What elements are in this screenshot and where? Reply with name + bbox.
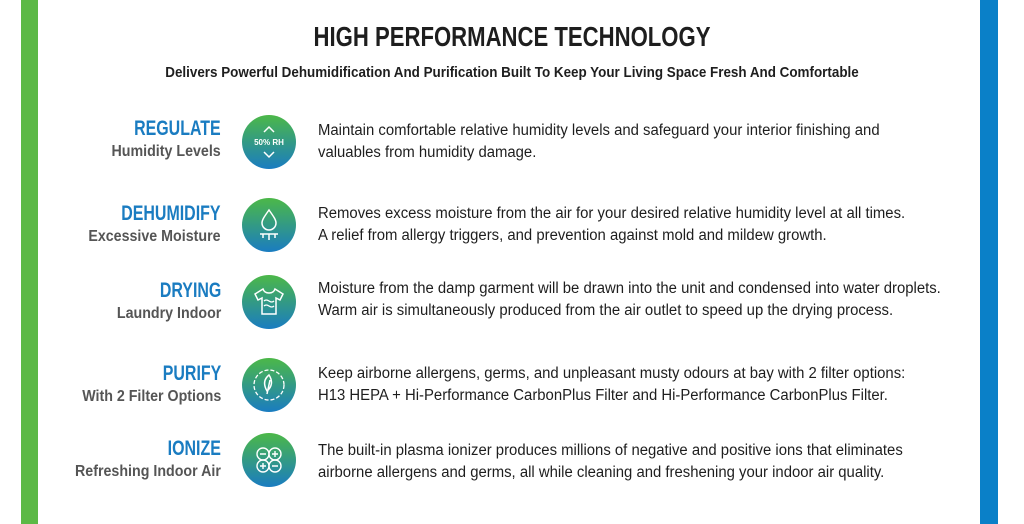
description: ionize: The built-in plasma ionizer produces millions of negative and positive ions that eliminates <box>318 442 903 459</box>
heading: dehumidify <box>89 202 221 245</box>
row: regulate <box>112 115 880 169</box>
icon: ions <box>242 433 296 487</box>
row: ionize <box>75 433 903 487</box>
icon: water drop <box>242 198 296 252</box>
heading: dehumidify: DEHUMIDIFY <box>122 202 221 225</box>
description: drying <box>318 280 941 319</box>
left green bar <box>21 0 38 524</box>
row: dehumidify <box>89 198 905 252</box>
icon: leaf <box>242 358 296 412</box>
right blue bar <box>980 0 998 524</box>
row: drying <box>117 275 941 329</box>
heading: regulate: Humidity Levels <box>112 143 221 160</box>
icon: 50% RH: 50% RH <box>254 138 284 147</box>
heading: drying: Laundry Indoor <box>117 305 221 322</box>
description: purify: H13 HEPA + Hi-Performance CarbonPlus Filter and Hi-Performance CarbonPlus Filter. <box>318 387 888 404</box>
description: ionize: airborne allergens and germs, all while cleaning and freshening your indoor air quality. <box>318 464 884 481</box>
heading: ionize <box>75 437 221 480</box>
description: drying: Warm air is simultaneously produced from the air outlet to speed up the drying process. <box>318 302 893 319</box>
description: purify: Keep airborne allergens, germs, and unpleasant musty odours at bay with 2 filter options: <box>318 365 905 382</box>
heading: regulate <box>112 117 221 160</box>
subtitle: Delivers Powerful Dehumidification And Purification Built To Keep Your Living Space Fresh And Comfortable <box>165 64 859 81</box>
heading: dehumidify: Excessive Moisture <box>89 228 221 245</box>
heading: drying <box>117 279 222 322</box>
heading: purify <box>82 362 221 405</box>
row: purify <box>82 358 905 412</box>
description: dehumidify: Removes excess moisture from the air for your desired relative humidity level at all times. <box>318 205 905 222</box>
description: regulate: Maintain comfortable relative humidity levels and safeguard your interior finishing and <box>318 122 880 139</box>
heading: regulate: REGULATE <box>134 117 221 140</box>
description: purify <box>318 365 905 404</box>
description: regulate: valuables from humidity damage. <box>318 144 536 161</box>
title: HIGH PERFORMANCE TECHNOLOGY <box>314 21 710 52</box>
description: drying: Moisture from the damp garment will be drawn into the unit and condensed into water droplets. <box>318 280 941 297</box>
heading: ionize: IONIZE <box>168 437 221 460</box>
description: dehumidify <box>318 205 905 244</box>
heading: drying: DRYING <box>160 279 221 302</box>
description: ionize <box>318 442 903 481</box>
icon: 50% RH <box>242 115 296 169</box>
description: regulate <box>318 122 880 161</box>
icon: shirt <box>242 275 296 329</box>
heading: purify: With 2 Filter Options <box>82 388 221 405</box>
heading: purify: PURIFY <box>162 362 221 385</box>
heading: ionize: Refreshing Indoor Air <box>75 463 221 480</box>
description: dehumidify: A relief from allergy triggers, and prevention against mold and mildew growth. <box>318 227 827 244</box>
